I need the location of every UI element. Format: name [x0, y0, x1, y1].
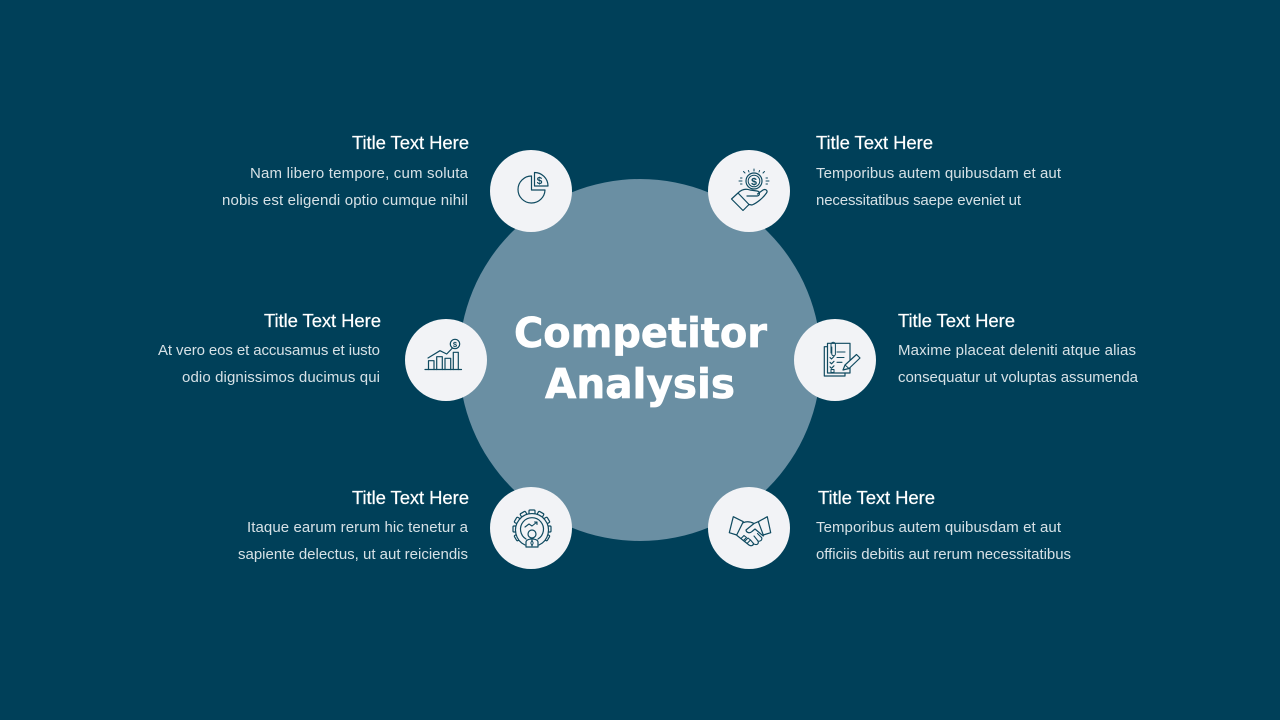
item: bottom left — [238, 487, 469, 563]
middle right heading: Title Text Here — [898, 310, 1015, 331]
node: checklist — [794, 319, 876, 401]
icon: clipboard checklist with pen — [824, 342, 860, 376]
icon: pie chart with dollar: $ — [537, 176, 543, 187]
icon: hand holding coin: $ — [751, 176, 757, 188]
top right body text: Temporibus autem quibusdam et aut — [816, 165, 1062, 182]
bottom left body text: sapiente delectus, ut aut reiciendis — [238, 546, 468, 563]
bottom left body text: Itaque earum rerum hic tenetur a — [247, 519, 469, 536]
bottom right heading: Title Text Here — [818, 487, 935, 508]
node: growth chart — [405, 319, 487, 401]
bottom right body text: Temporibus autem quibusdam et aut — [816, 519, 1062, 536]
icon: bar chart with dollar: $ — [453, 340, 458, 349]
bottom right body text — [816, 519, 1071, 563]
node: pie chart — [490, 150, 572, 232]
middle right body text: Maxime placeat deleniti atque alias — [898, 342, 1136, 359]
bottom left body text — [238, 519, 469, 563]
icon: handshake — [729, 517, 771, 546]
top left body text: Nam libero tempore, cum soluta — [250, 165, 469, 182]
item: middle left — [158, 310, 381, 386]
middle left body text: At vero eos et accusamus et iusto — [158, 342, 380, 359]
middle left body text — [158, 342, 380, 386]
item: top left — [222, 132, 469, 209]
middle left body text: odio dignissimos ducimus qui — [182, 369, 380, 386]
middle left heading: Title Text Here — [264, 310, 381, 331]
item: top right — [816, 132, 1062, 209]
bottom right body text: officiis debitis aut rerum necessitatibus — [816, 546, 1071, 563]
item: middle right — [898, 310, 1139, 386]
icon: gear with person — [513, 510, 551, 547]
top left heading: Title Text Here — [352, 132, 469, 153]
node: hand with coin — [708, 150, 790, 232]
top right body text: necessitatibus saepe eveniet ut — [816, 192, 1022, 209]
title — [514, 309, 768, 408]
bottom left heading: Title Text Here — [352, 487, 469, 508]
top right body text — [816, 165, 1062, 209]
top left body text — [222, 165, 469, 209]
node: handshake — [708, 487, 790, 569]
central circle — [459, 179, 821, 541]
title: Analysis — [545, 360, 735, 408]
top left body text: nobis est eligendi optio cumque nihil — [222, 192, 468, 209]
top right heading: Title Text Here — [816, 132, 933, 153]
middle right body text — [898, 342, 1139, 386]
item: bottom right — [816, 487, 1071, 563]
middle right body text: consequatur ut voluptas assumenda — [898, 369, 1139, 386]
title: Competitor — [514, 309, 768, 357]
node: gear — [490, 487, 572, 569]
